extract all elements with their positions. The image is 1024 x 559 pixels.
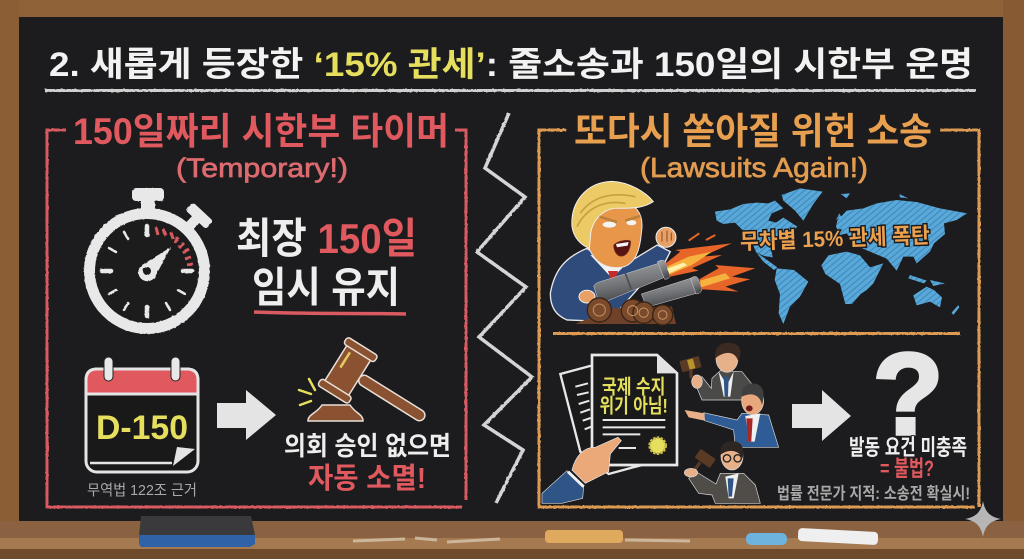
white chalk [798,528,878,545]
illustration: documents with pointing hand: 국제 수지 [602,376,665,398]
text block: conditions not met [849,435,967,481]
caption: legal experts note: 법률 전문가 지적: 소송전 확실시! [777,484,970,503]
illustration: documents with pointing hand: 위기 아님! [599,396,668,418]
chalk lightning divider [477,113,532,503]
panel heading: 또다시 쏟아질 위헌 소송 [574,111,932,152]
title: 2. 새롭게 등장한 ‘15% 관세’ : 줄소송과 150일의 시한부 운명 [49,46,973,84]
sparkle mark [965,501,1001,537]
divider [553,332,960,335]
panel subheading: (Lawsuits Again!) [640,152,868,183]
icon: D-150 calendar [86,357,198,472]
world map [715,188,967,324]
text block: maximum 150 days [236,215,417,314]
icon: stopwatch [90,188,213,328]
illustration: documents with pointing hand [542,355,677,503]
text block: conditions not met: = 불법? [880,456,934,481]
panel subheading: (Temporary!) [176,153,348,183]
panel: temporary timer [47,111,466,507]
icon: D-150 calendar: D-150 [96,409,188,447]
text block: auto expiry: 의회 승인 없으면 [284,431,451,461]
arrow [217,390,276,440]
lawyer two [685,384,779,447]
lawyer three [684,441,760,503]
text block: auto expiry: 자동 소멸! [308,462,426,495]
text block: conditions not met: 발동 요건 미충족 [849,435,967,460]
panel heading: 150일짜리 시한부 타이머 [73,111,449,152]
text block: auto expiry [284,431,451,495]
panel border: orange [539,130,979,507]
text block: maximum 150 days: 최장 150일 [236,215,417,262]
icon: question mark: ? [873,329,943,459]
caption: trade act section 122: 무역법 122조 근거 [87,482,197,499]
orange chalk [545,530,623,543]
icon: gavel [299,337,439,442]
chalk dust [353,538,690,542]
blue chalk [746,533,787,545]
illustration: three legal experts [679,343,779,503]
map label: 무차별 15% 관세 폭탄 [740,223,930,254]
text block: maximum 150 days: 임시 유지 [252,264,400,311]
eraser [139,516,255,547]
illustration: cartoon president firing cannons [550,181,755,325]
arrow [792,390,851,441]
panel border: red [47,130,466,507]
panel: lawsuits again [539,111,979,507]
lawyer one [679,343,751,400]
